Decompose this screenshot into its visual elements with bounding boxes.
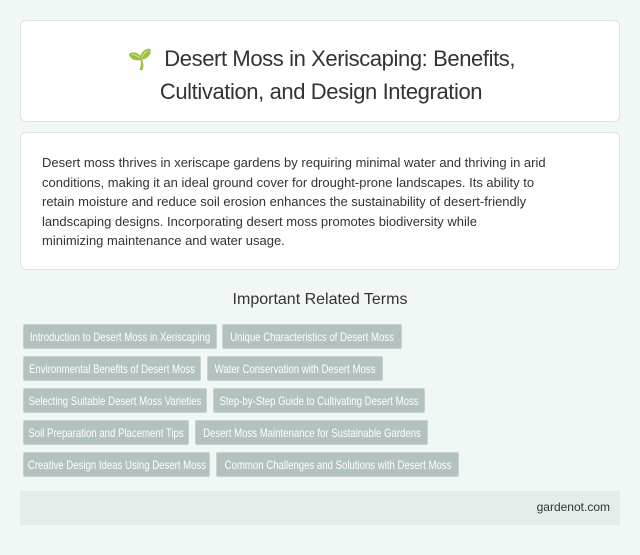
title: 🌱 [128, 49, 152, 71]
tag [213, 388, 425, 413]
tag: Common Challenges and Solutions with Desert Moss [224, 458, 451, 472]
title: Desert Moss in Xeriscaping: Benefits, Cultivation, and Design Integration [160, 46, 515, 104]
tag [23, 356, 201, 381]
tag [23, 388, 207, 413]
tag [195, 420, 428, 445]
tag [207, 356, 383, 381]
tag [216, 452, 459, 477]
tag [222, 324, 402, 349]
section heading: Important Related Terms [233, 291, 407, 308]
tag: Desert Moss Maintenance for Sustainable Gardens [203, 426, 420, 440]
tag: Introduction to Desert Moss in Xeriscaping [30, 330, 210, 344]
header card [20, 20, 620, 122]
tag: Step-by-Step Guide to Cultivating Desert Moss [219, 394, 419, 408]
tag [23, 324, 217, 349]
tag: Environmental Benefits of Desert Moss [29, 362, 195, 376]
tag: Creative Design Ideas Using Desert Moss [27, 458, 206, 472]
footer [20, 491, 620, 525]
tag: Unique Characteristics of Desert Moss [230, 330, 394, 344]
tag: Water Conservation with Desert Moss [215, 362, 375, 376]
description text: landscaping designs. Incorporating desert moss promotes biodiversity while [42, 214, 477, 229]
footer credit: gardenot.com [537, 500, 610, 514]
tag: Selecting Suitable Desert Moss Varieties [29, 394, 201, 408]
description text: minimizing maintenance and water usage. [42, 233, 285, 248]
tag [23, 420, 189, 445]
tag [23, 452, 210, 477]
description text: Desert moss thrives in xeriscape gardens by requiring minimal water and thriving in arid [42, 155, 546, 170]
description text: retain moisture and reduce soil erosion enhances the sustainability of desert-friendly [42, 194, 526, 209]
description text [42, 155, 546, 248]
tag: Soil Preparation and Placement Tips [28, 426, 184, 440]
description card [20, 132, 620, 270]
description text: conditions, making it an ideal ground cover for drought-prone landscapes. Its ability to [42, 175, 534, 190]
